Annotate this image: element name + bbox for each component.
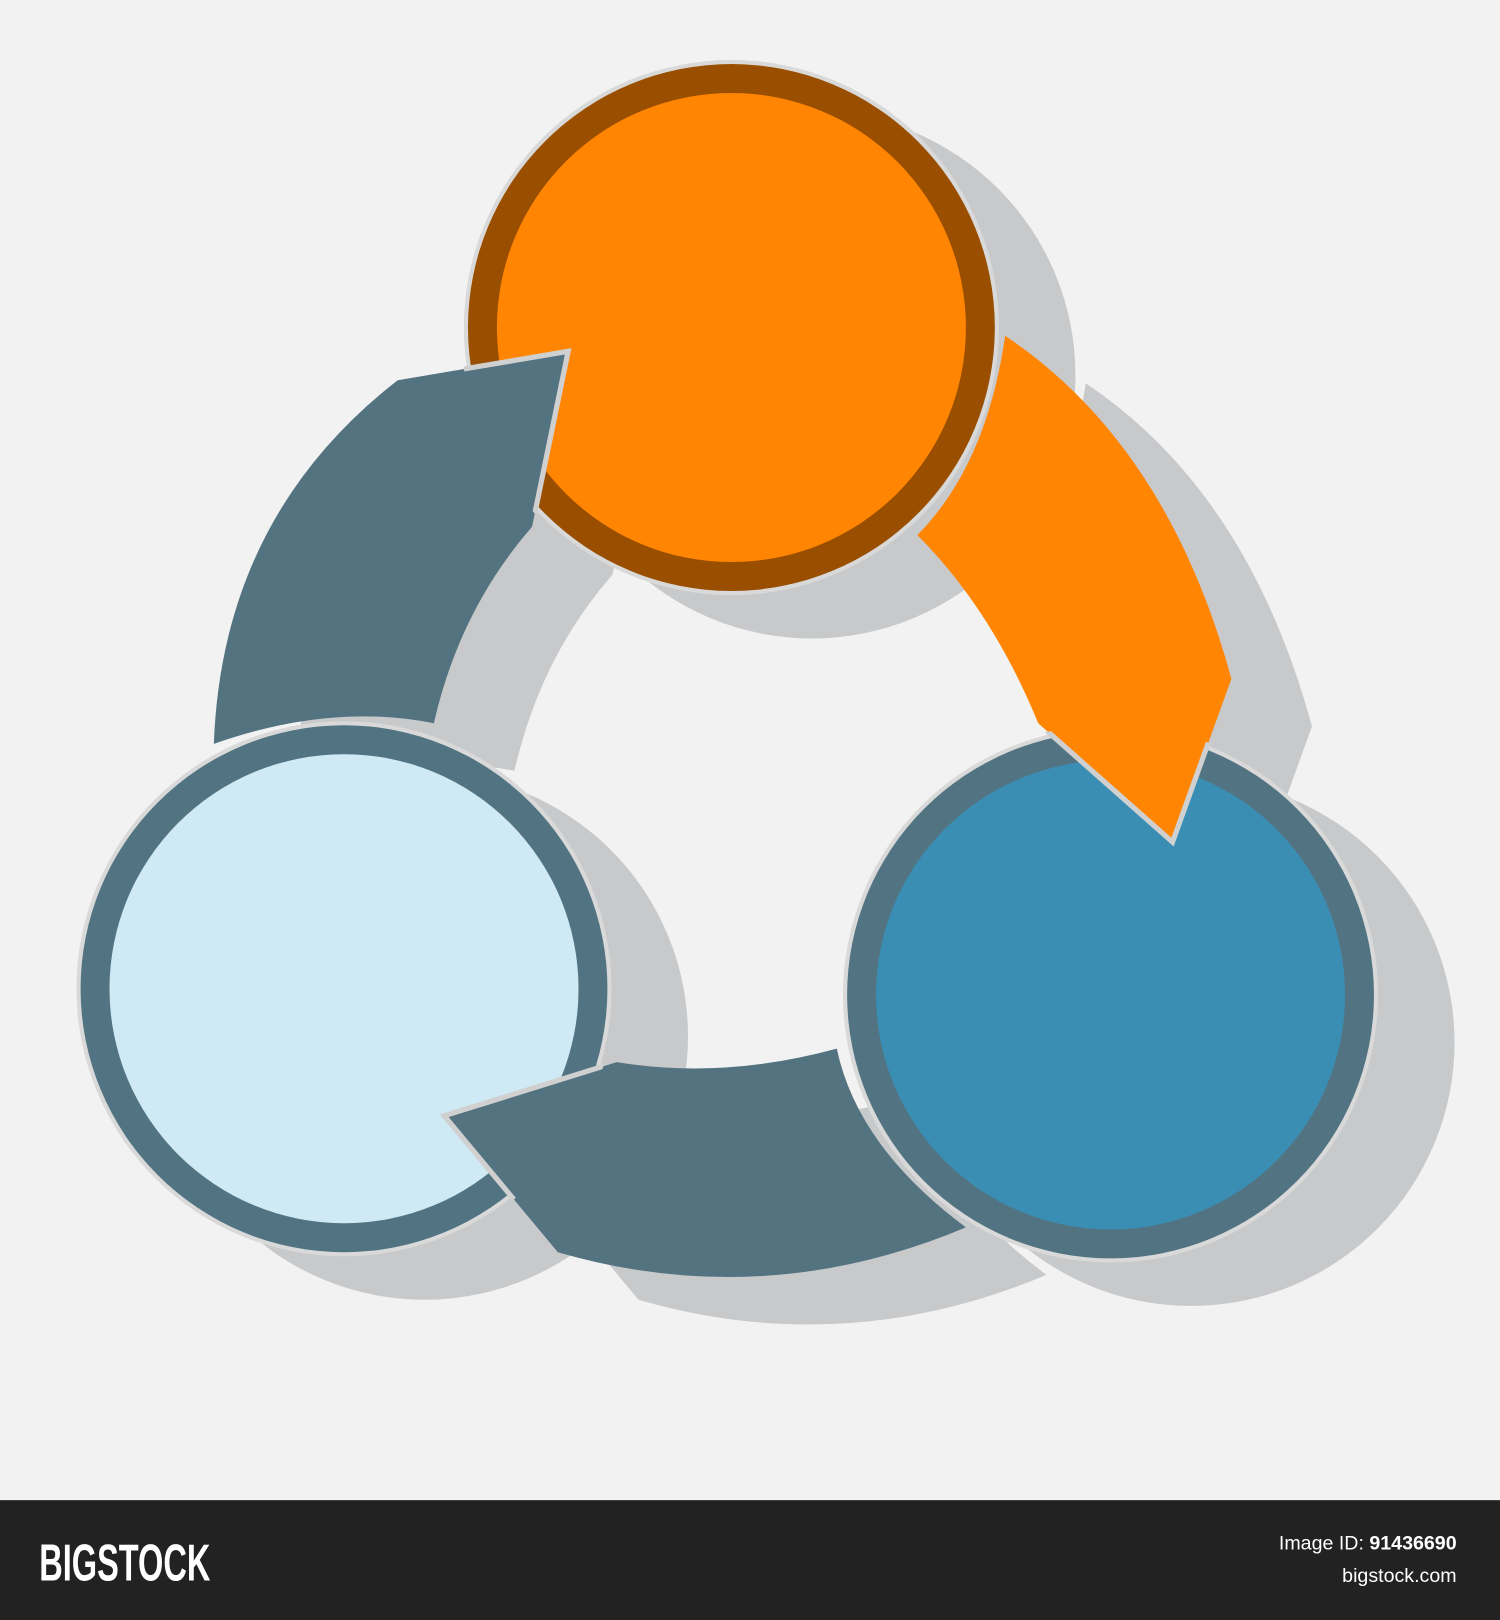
arrow: left circle to top circle (slate) [214, 351, 568, 744]
arrowhead: slate into top circle [464, 348, 572, 514]
footer logo: BIGSTOCK [39, 1535, 210, 1593]
circle: left light blue [76, 721, 612, 1256]
footer bar [0, 1500, 1500, 1620]
arrow: top circle to right circle (orange) [917, 336, 1231, 842]
footer image id: Image ID: 91436690 [1279, 1533, 1457, 1555]
circle: top orange [464, 60, 999, 595]
arrowhead: orange into right circle [1045, 727, 1210, 846]
footer url: bigstock.com [1342, 1565, 1457, 1587]
circle: right blue [843, 727, 1378, 1263]
arrow: right circle to left circle (slate) [444, 1049, 966, 1277]
arrowhead: slate into left circle [440, 1064, 604, 1200]
shadows [161, 112, 1455, 1325]
